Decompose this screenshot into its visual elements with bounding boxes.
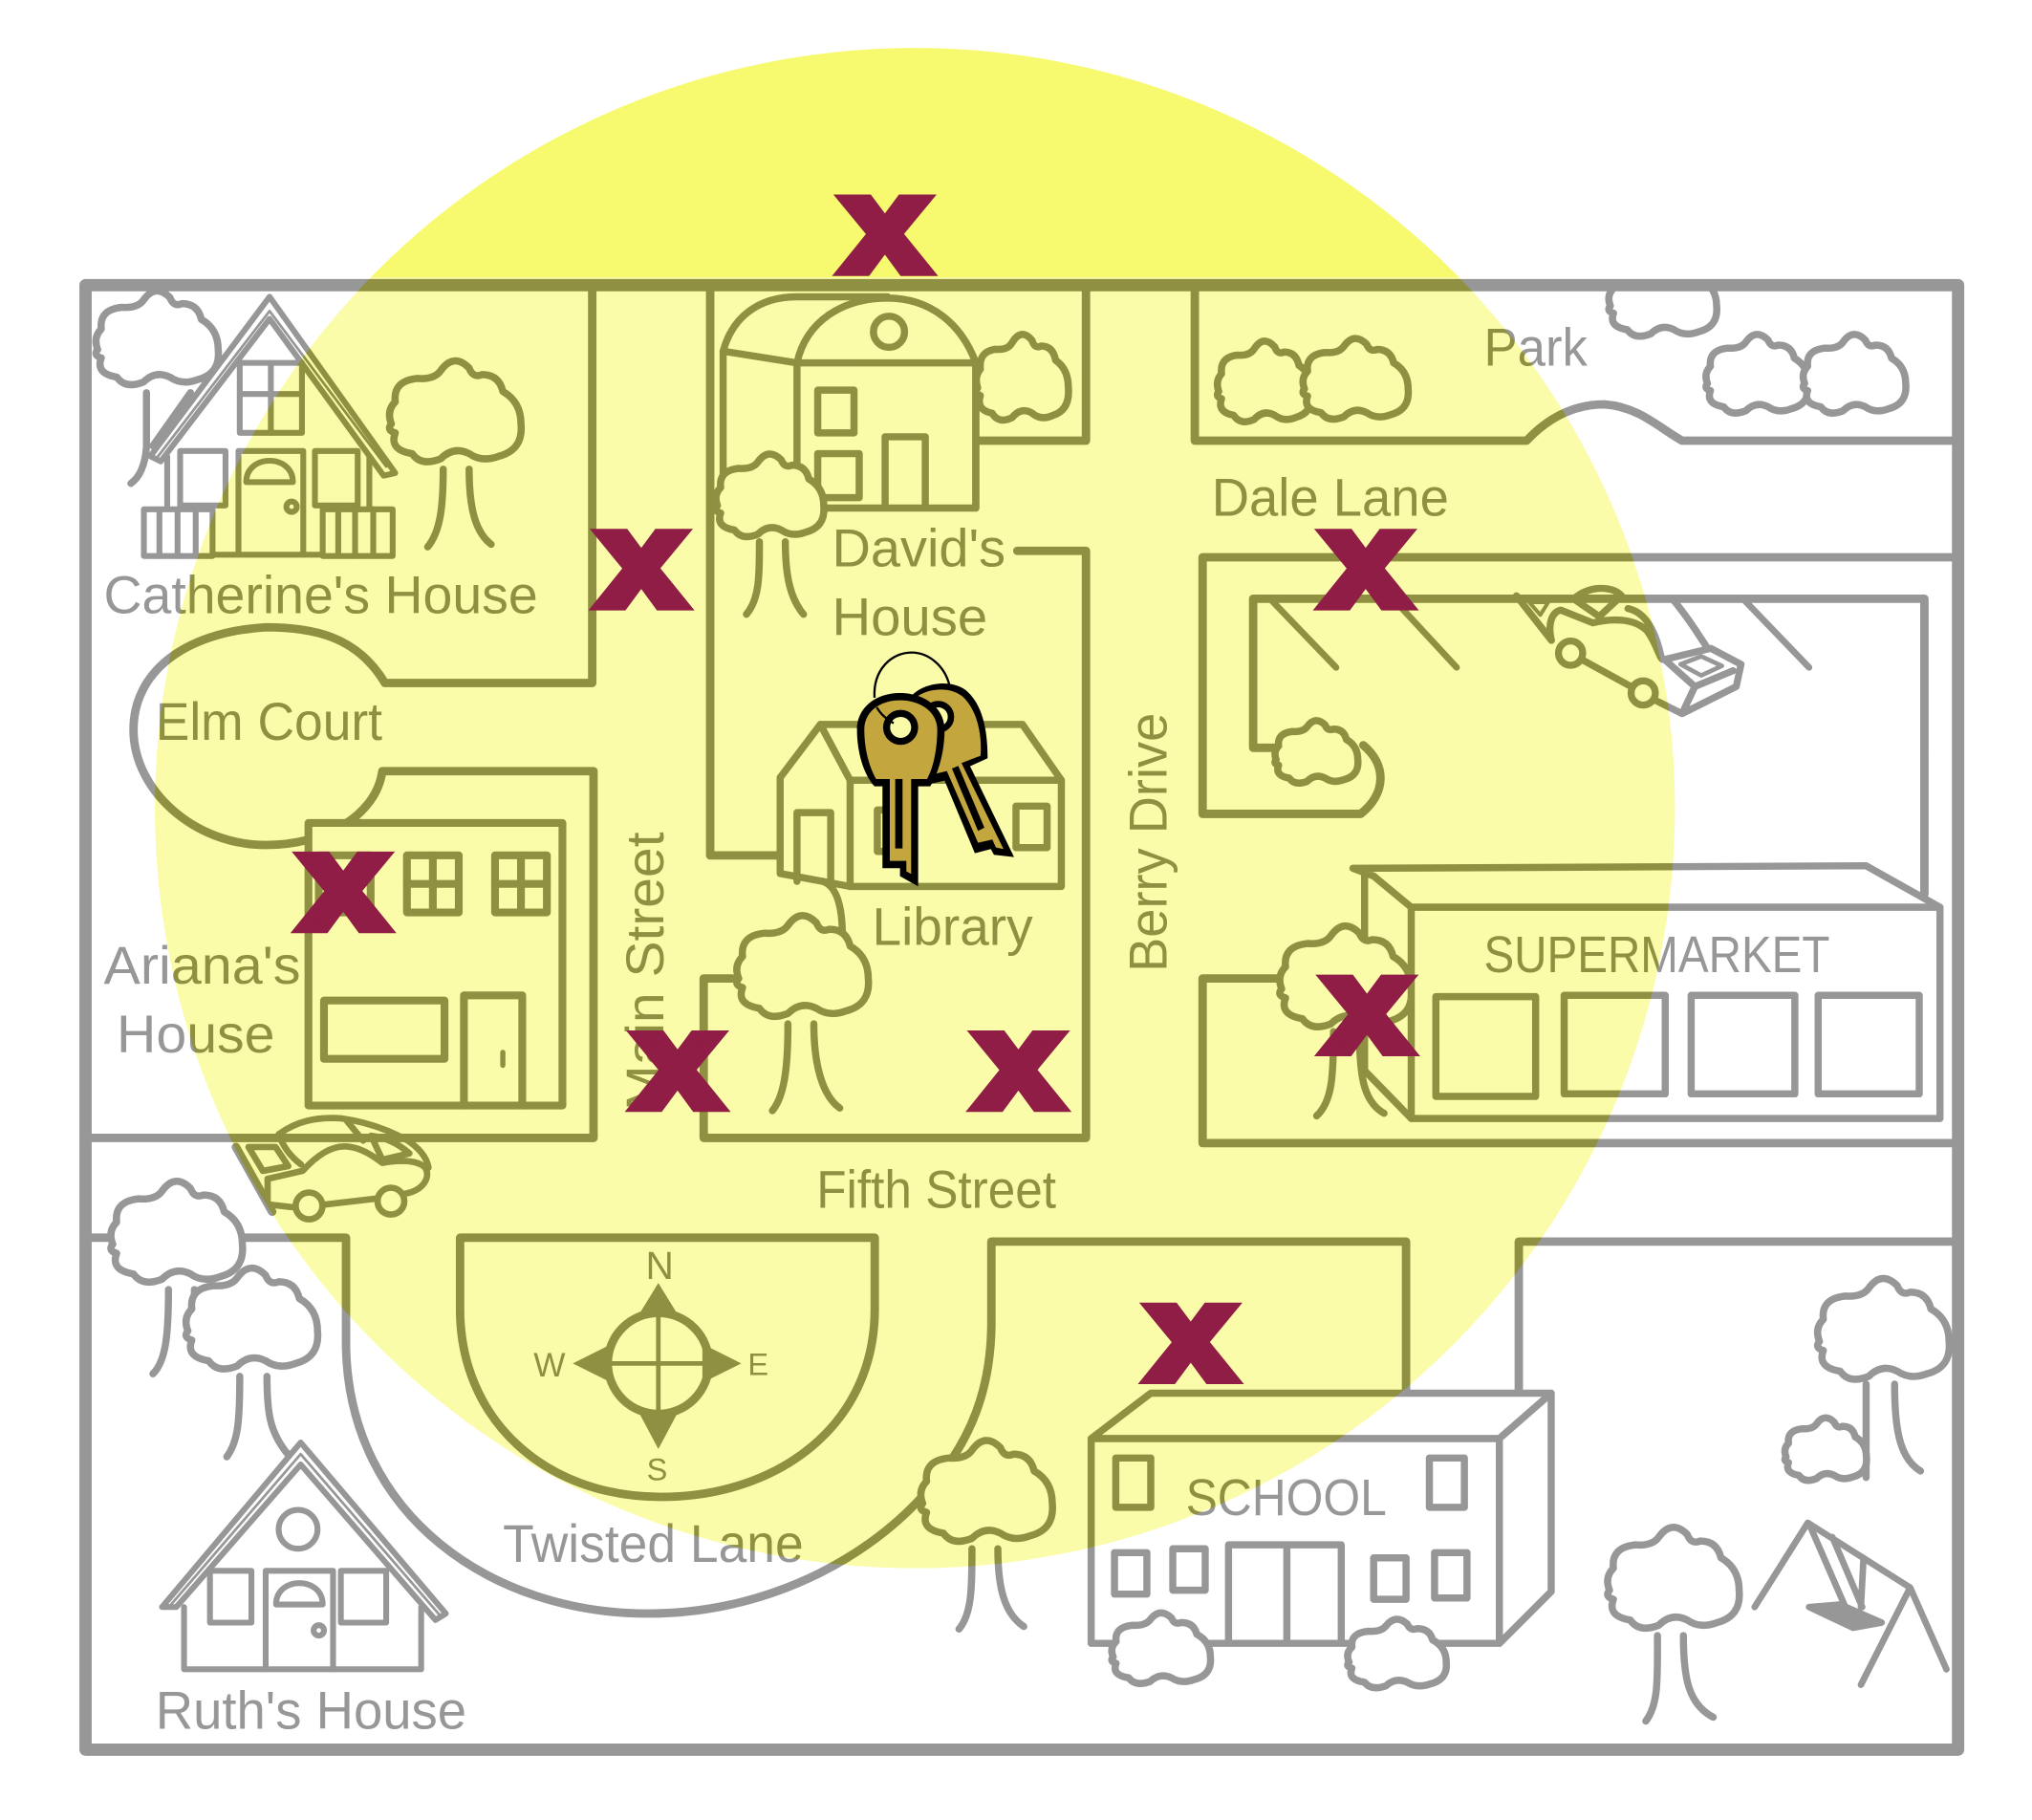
label: Ariana's House: House [117,1005,274,1064]
x marker: school: x [1148,1258,1234,1408]
parking slots [1270,598,1809,667]
label: Fifth Street: Fifth Street [816,1160,1057,1220]
label: David's House: House [832,587,987,646]
label: Dale Lane: Dale Lane [1212,468,1449,528]
label: Ariana's House: Ariana's [103,936,301,995]
compass: S [647,1452,667,1486]
label: Ruth's House: Ruth's House [156,1681,466,1741]
tree: Twisted Lane [920,1441,1052,1629]
David's house [724,296,976,508]
keys [857,653,1014,886]
label: Berry Drive: Berry Drive [1118,713,1178,972]
park bush: clipped by border [1605,291,1720,340]
Catherine's house [144,296,396,556]
x marker: Ariana's house: x [301,807,386,958]
map wash over circle [77,277,1964,1758]
Ariana's house [309,823,562,1106]
label: Library: Library [873,897,1033,956]
label: Park: Park [1483,317,1588,377]
key ring [875,653,949,698]
bush: David's house [976,335,1069,420]
David's house front wall overlap [973,363,979,508]
park bushes [1218,335,1906,422]
x marker: library garden: x [976,986,1061,1137]
tree: playground upper [1818,1278,1949,1478]
compass [533,1244,768,1486]
Ruth's house [162,1442,445,1669]
label: SUPERMARKET: SUPERMARKET [1483,926,1829,984]
supermarket [1412,907,1940,1118]
school [1092,1394,1551,1643]
library [780,725,1061,936]
car: parking lot [1517,588,1741,714]
bush: playground [1784,1418,1867,1481]
neighbourhood map [86,255,1958,1749]
back key [913,683,1014,857]
x marker: Main Street north: x [598,484,684,635]
label: SCHOOL: SCHOOL [1186,1469,1387,1527]
label: David's House: David's [832,519,1005,578]
compass: E [747,1348,768,1382]
search radius circle [155,48,1675,1569]
label: Elm Court: Elm Court [156,692,383,751]
label: Main Street: Main Street [616,832,675,1111]
compass: N [645,1244,674,1288]
label: Twisted Lane: Twisted Lane [503,1514,804,1573]
label: Ariana's House [103,936,301,1064]
x marker: Dale Lane: x [1323,484,1409,635]
trees: bottom left pair [111,1181,317,1457]
bush: parking lot [1275,721,1358,783]
school bushes [1112,1613,1446,1688]
map background [86,285,1958,1749]
tree: Catherine's garden [390,361,521,547]
traffic island [460,1238,875,1497]
outer map border [86,285,1958,1749]
label: David's House [832,519,1005,646]
x marker: top: x [842,150,928,300]
tree: supermarket [1280,926,1412,1116]
x marker: supermarket: x [1325,930,1410,1080]
car: Fifth Street [249,1118,428,1220]
x marker: Main Street south: x [635,986,721,1137]
tree: library garden [737,916,869,1111]
street block outlines [86,285,1958,1614]
supermarket side wall [1353,866,1940,1118]
swing set [1755,1523,1946,1685]
front key [857,693,944,886]
compass: W [533,1347,566,1384]
tree: playground lower [1608,1528,1740,1722]
tree: top left [96,291,219,484]
tree: David's garden [716,454,824,615]
label: Catherine's House: Catherine's House [103,565,538,624]
